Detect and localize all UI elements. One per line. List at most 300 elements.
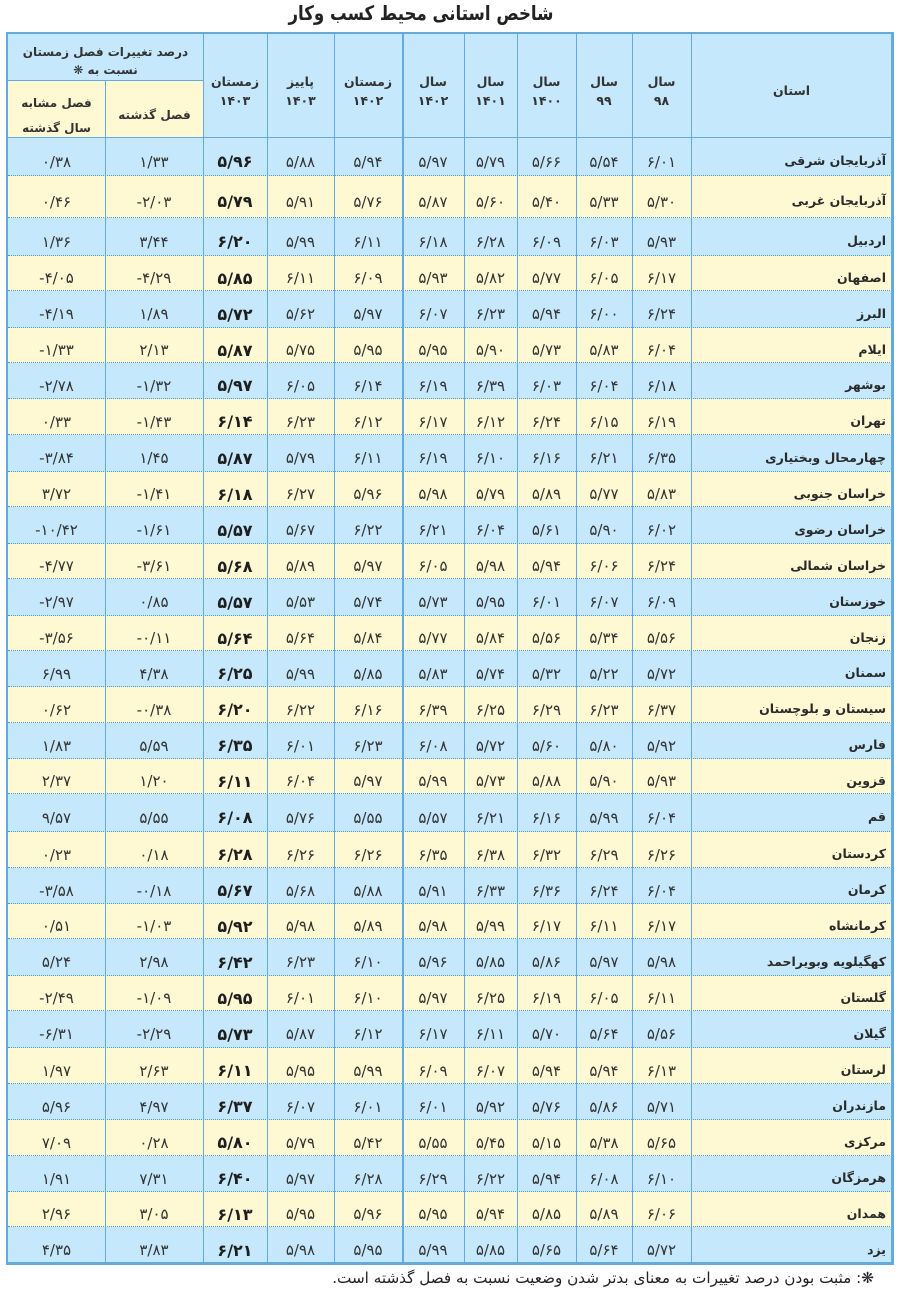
row: Golestan: -۱/۰۹ [137, 989, 171, 1007]
row: Qom: ۶/۱۶ [532, 808, 561, 826]
row: Isfahan: ۵/۸۲ [476, 269, 505, 287]
row: Fars: ۵/۵۹ [139, 736, 169, 754]
row: Ilam: -۱/۳۳ [39, 341, 74, 359]
row: Hormozgan: ۷/۳۱ [139, 1170, 169, 1188]
row: Golestan: ۶/۰۱ [286, 989, 315, 1007]
row: Mazandaran: ۴/۹۷ [139, 1098, 169, 1116]
row: Alborz: ۱/۸۹ [139, 305, 169, 323]
row: Qom: ۶/۰۸ [217, 808, 253, 827]
row: Kurdistan [8, 832, 892, 868]
row: Razavi Khorasan: ۶/۰۲ [647, 521, 676, 539]
row: North Khorasan: ۶/۰۵ [418, 557, 448, 575]
row: East Azerbaijan: ۵/۷۹ [476, 152, 505, 170]
row: Qazvin: ۵/۹۹ [418, 772, 448, 790]
row: Lorestan: ۱/۹۷ [42, 1062, 71, 1080]
header: year 98: ۹۸ [654, 92, 669, 108]
row: Kerman: ۶/۳۶ [532, 882, 561, 900]
row: Markazi: ۵/۵۵ [418, 1134, 448, 1152]
row: Razavi Khorasan: -۱۰/۴۲ [35, 521, 78, 539]
row: Chaharmahal and Bakhtiari: ۶/۱۱ [353, 449, 383, 467]
row: Kurdistan: ۶/۲۶ [286, 846, 315, 864]
row: Kerman: ۵/۶۷ [217, 881, 253, 900]
header: winter 1402: ۱۴۰۲ [353, 92, 383, 108]
row: Golestan [8, 976, 892, 1011]
row: Hormozgan: ۶/۲۸ [353, 1170, 383, 1188]
row: Sistan and Baluchestan [8, 687, 892, 723]
header: same season last year [8, 81, 105, 138]
row: Kermanshah: ۵/۹۸ [418, 917, 448, 935]
row: Semnan [8, 651, 892, 687]
row: West Azerbaijan: ۵/۳۳ [589, 192, 619, 210]
row: Fars: ۱/۸۳ [42, 736, 71, 754]
row: Isfahan [8, 256, 892, 291]
row: Qom: ۵/۵۵ [139, 808, 169, 826]
row: Mazandaran: ۵/۸۶ [589, 1098, 619, 1116]
row: Sistan and Baluchestan: ۰/۶۲ [42, 700, 71, 718]
row: West Azerbaijan: ۵/۷۶ [353, 192, 383, 210]
row: Lorestan: ۵/۹۴ [589, 1062, 619, 1080]
row: Sistan and Baluchestan: سیستان و بلوچستان [759, 701, 886, 716]
row: Yazd: ۵/۹۹ [418, 1241, 448, 1259]
row: Mazandaran [8, 1084, 892, 1120]
row: Khuzestan: ۰/۸۵ [139, 593, 169, 611]
row: Tehran: ۶/۲۴ [532, 412, 561, 430]
row: Semnan: ۶/۲۵ [217, 664, 253, 683]
row: West Azerbaijan: ۰/۴۶ [42, 192, 71, 210]
row: Ardabil: ۳/۴۴ [139, 232, 169, 250]
row: Chaharmahal and Bakhtiari: ۶/۱۰ [476, 449, 505, 467]
row: South Khorasan: -۱/۴۱ [137, 485, 171, 503]
row: North Khorasan: ۵/۶۸ [217, 556, 253, 576]
row: Golestan: گلستان [840, 990, 886, 1004]
row: Kohgiluyeh and Boyer-Ahmad: ۶/۴۲ [217, 952, 253, 972]
row: Isfahan: -۴/۲۹ [137, 269, 171, 287]
row: East Azerbaijan: ۱/۳۳ [139, 152, 169, 170]
row: Tehran: ۶/۱۹ [647, 412, 676, 430]
row: Zanjan: ۵/۵۶ [532, 629, 561, 647]
row: Ilam [8, 328, 892, 363]
row: Sistan and Baluchestan: ۶/۲۹ [532, 700, 561, 718]
row: Isfahan: -۴/۰۵ [39, 269, 74, 287]
row: Isfahan: ۶/۱۷ [647, 269, 676, 287]
row: West Azerbaijan: ۵/۴۰ [532, 192, 561, 210]
row: Zanjan: ۵/۶۴ [217, 628, 253, 648]
row: Ardabil: ۶/۰۳ [589, 232, 619, 250]
row: North Khorasan: ۵/۹۸ [476, 557, 505, 575]
row: Kohgiluyeh and Boyer-Ahmad: ۵/۹۸ [647, 953, 676, 971]
row: Yazd: ۶/۲۱ [217, 1240, 253, 1260]
row: South Khorasan: خراسان جنوبی [794, 486, 886, 500]
row: Semnan: ۵/۷۲ [647, 664, 676, 682]
header: winter 1402: زمستان [344, 74, 392, 88]
row: Gilan: ۵/۷۰ [532, 1025, 561, 1043]
header: winter 1402 [344, 74, 392, 108]
row: Hormozgan: ۵/۹۷ [286, 1170, 315, 1188]
row: Kerman: ۵/۸۸ [353, 882, 383, 900]
row: Yazd: ۵/۷۲ [647, 1241, 676, 1259]
row: Hormozgan: هرمزگان [831, 1170, 886, 1185]
row: Gilan: ۵/۸۷ [286, 1025, 315, 1043]
row: Hormozgan: ۶/۱۰ [647, 1170, 676, 1188]
row: Qazvin: ۶/۰۴ [286, 772, 315, 790]
header: year 1400: ۱۴۰۰ [531, 92, 562, 108]
row: Kurdistan: ۶/۲۸ [217, 845, 253, 864]
row: South Khorasan: ۵/۷۹ [476, 485, 505, 503]
row: Ilam: ۵/۸۳ [589, 341, 619, 359]
row: Alborz: ۶/۰۰ [589, 305, 619, 323]
row: Qom: ۹/۵۷ [42, 808, 71, 826]
row: Fars: ۵/۸۰ [589, 736, 619, 754]
row: Mazandaran: ۵/۷۶ [532, 1098, 561, 1116]
row: Sistan and Baluchestan: -۰/۳۸ [137, 700, 171, 718]
row: Khuzestan: ۵/۵۷ [217, 592, 253, 612]
row: Ardabil: ۵/۹۳ [647, 232, 676, 250]
row: Sistan and Baluchestan: ۶/۳۷ [647, 700, 676, 718]
row: Markazi: ۵/۶۵ [647, 1134, 676, 1152]
row: Tehran: ۰/۳۳ [42, 412, 71, 430]
row: Golestan: ۶/۲۵ [476, 989, 505, 1007]
header: percent change group: نسبت به ❋ [73, 62, 138, 76]
row: East Azerbaijan: ۵/۹۷ [418, 152, 448, 170]
header: percent change group: درصد تغییرات فصل زمستان [23, 44, 188, 58]
row: Hormozgan: ۵/۹۴ [532, 1170, 561, 1188]
row: Kurdistan: ۶/۳۸ [476, 846, 505, 864]
row: Khuzestan [8, 579, 892, 616]
row: Razavi Khorasan: -۱/۶۱ [137, 521, 171, 539]
row: Kermanshah: ۶/۱۱ [589, 917, 619, 935]
row: Ardabil: ۶/۱۱ [353, 232, 383, 250]
row: West Azerbaijan: ۵/۸۷ [418, 192, 448, 210]
row: Ilam: ۲/۱۳ [139, 341, 169, 359]
row: Ilam: ۵/۷۵ [286, 341, 315, 359]
title: شاخص استانی محیط کسب وکار [288, 1, 554, 25]
row: Bushehr: -۲/۷۸ [39, 376, 74, 394]
row: Yazd: ۵/۶۵ [532, 1241, 561, 1259]
row: Isfahan: ۵/۷۷ [532, 269, 561, 287]
row: Fars: ۵/۹۲ [647, 736, 676, 754]
row: Golestan: ۶/۱۰ [353, 989, 383, 1007]
row: Golestan: ۵/۹۷ [418, 989, 448, 1007]
row: Kermanshah: کرمانشاه [829, 918, 886, 932]
row: Zanjan: ۵/۶۴ [286, 629, 315, 647]
row: Razavi Khorasan: ۵/۶۱ [532, 521, 561, 539]
row: Khuzestan: ۶/۰۹ [647, 593, 676, 611]
row: Ilam: ۶/۰۴ [647, 341, 676, 359]
header: winter 1403 [211, 74, 259, 108]
row: Isfahan: ۶/۱۱ [286, 269, 315, 287]
header: year 98 [648, 74, 675, 108]
row: Zanjan: زنجان [850, 630, 886, 644]
row: Zanjan: ۵/۵۶ [647, 629, 676, 647]
row: Chaharmahal and Bakhtiari: -۳/۸۴ [39, 449, 74, 467]
row: Gilan [8, 1011, 892, 1048]
row: Semnan: ۵/۹۹ [286, 664, 315, 682]
row: Kermanshah: ۵/۹۸ [286, 917, 315, 935]
row: Razavi Khorasan: ۵/۹۰ [589, 521, 619, 539]
row: Alborz: ۵/۹۷ [353, 305, 383, 323]
row: Ardabil: ۶/۱۸ [418, 232, 448, 250]
row: Bushehr: ۶/۰۵ [286, 376, 315, 394]
row: Zanjan: ۵/۸۴ [353, 629, 383, 647]
row: Semnan: ۵/۲۲ [589, 664, 619, 682]
row: West Azerbaijan: ۵/۷۹ [217, 192, 253, 211]
row: Gilan: گیلان [853, 1026, 886, 1040]
row: Kermanshah: -۱/۰۳ [137, 917, 171, 935]
header: same season last year: سال گذشته [22, 120, 91, 134]
row: Markazi: ۵/۴۵ [476, 1134, 505, 1152]
row: Hamedan: ۶/۰۶ [647, 1205, 676, 1223]
row: Khuzestan: -۲/۹۷ [39, 593, 74, 611]
row: Hormozgan [8, 1156, 892, 1192]
row: Fars: فارس [849, 737, 886, 752]
row: East Azerbaijan: ۶/۰۱ [647, 152, 676, 170]
header: year 1400 [531, 74, 562, 108]
row: Fars: ۶/۰۱ [286, 736, 315, 754]
row: Kohgiluyeh and Boyer-Ahmad: ۵/۸۶ [532, 953, 561, 971]
row: North Khorasan: ۵/۹۴ [532, 557, 561, 575]
row: Kerman: ۶/۰۴ [647, 882, 676, 900]
row: Ilam: ایلام [858, 342, 886, 356]
row: Golestan: ۶/۱۹ [532, 989, 561, 1007]
row: Qazvin: ۶/۱۱ [217, 772, 253, 790]
row: Yazd: ۵/۹۵ [353, 1241, 383, 1259]
row: Markazi [8, 1120, 892, 1156]
row: Mazandaran: ۵/۹۲ [476, 1098, 505, 1116]
row: Lorestan: ۶/۱۱ [217, 1061, 253, 1080]
row: Kerman: ۶/۲۴ [589, 882, 619, 900]
row: Qom: قم [868, 809, 886, 824]
row: Semnan: ۶/۹۹ [42, 664, 71, 682]
row: Golestan: ۵/۹۵ [217, 988, 253, 1008]
row: Isfahan: اصفهان [837, 270, 886, 284]
row: North Khorasan: -۳/۶۱ [137, 557, 171, 575]
row: Lorestan: ۲/۶۳ [139, 1062, 169, 1080]
row: Alborz: ۵/۶۲ [286, 305, 315, 323]
row: Razavi Khorasan [8, 507, 892, 544]
row: Semnan: ۴/۳۸ [139, 664, 169, 682]
row: Chaharmahal and Bakhtiari: ۶/۲۱ [589, 449, 619, 467]
row: Fars: ۵/۷۲ [476, 736, 505, 754]
row: Gilan: -۶/۳۱ [39, 1025, 74, 1043]
row: Kurdistan: ۶/۳۲ [532, 846, 561, 864]
row: Lorestan: ۵/۹۵ [286, 1062, 315, 1080]
row: Fars: ۵/۶۰ [532, 736, 561, 754]
row: Semnan: ۵/۷۴ [476, 664, 505, 682]
row: Markazi: ۵/۴۲ [353, 1134, 383, 1152]
row: South Khorasan: ۵/۹۶ [353, 485, 383, 503]
row: Kohgiluyeh and Boyer-Ahmad: ۵/۹۷ [589, 953, 619, 971]
row: Golestan: ۶/۱۱ [647, 989, 676, 1007]
row: East Azerbaijan: ۵/۹۶ [217, 152, 253, 171]
row: Kohgiluyeh and Boyer-Ahmad: ۶/۱۰ [353, 953, 383, 971]
row: Alborz: ۶/۰۷ [418, 305, 448, 323]
row: Khuzestan: ۵/۵۳ [286, 593, 315, 611]
row: Qazvin: قزوین [846, 772, 886, 788]
row: Qazvin: ۱/۲۰ [139, 772, 169, 790]
row: Isfahan: ۵/۹۳ [418, 269, 448, 287]
row: Hormozgan: ۶/۰۸ [589, 1170, 619, 1188]
row: Qom [8, 794, 892, 832]
row: Kurdistan: ۰/۱۸ [139, 846, 169, 864]
row: Hamedan: ۵/۸۹ [589, 1205, 619, 1223]
header: year 1402: ۱۴۰۲ [418, 92, 448, 108]
row: Hamedan: ۵/۹۵ [286, 1205, 315, 1223]
row: Tehran: ۶/۱۵ [589, 412, 619, 430]
row: South Khorasan: ۵/۸۳ [647, 485, 676, 503]
row: Lorestan: ۶/۱۳ [647, 1062, 676, 1080]
footnote: ❋: مثبت بودن درصد تغییرات به معنای بدتر شدن وضعیت نسبت به فصل گذشته است. [332, 1269, 874, 1287]
row: Hormozgan: ۶/۴۰ [217, 1169, 253, 1188]
row: Kurdistan: ۶/۳۵ [418, 846, 448, 864]
row: Sistan and Baluchestan: ۶/۲۰ [217, 700, 253, 719]
row: Qom: ۵/۵۷ [418, 808, 448, 826]
row: South Khorasan [8, 472, 892, 507]
row: Tehran: -۱/۴۳ [137, 412, 171, 430]
row: Hamedan [8, 1192, 892, 1227]
header: year 1401: سال [477, 74, 504, 88]
row: Kermanshah [8, 904, 892, 939]
row: Mazandaran: ۶/۰۱ [418, 1098, 448, 1116]
row: Qazvin: ۵/۹۳ [647, 772, 676, 790]
header: percent change group [23, 44, 188, 76]
row: Kerman [8, 868, 892, 904]
row: Qom: ۶/۲۱ [476, 808, 505, 826]
row: Markazi: مرکزی [844, 1134, 886, 1149]
row: Bushehr: ۵/۹۷ [217, 376, 253, 395]
row: Fars: ۶/۳۵ [217, 736, 253, 755]
header: autumn 1403 [285, 74, 316, 108]
row: Kermanshah: ۰/۵۱ [42, 917, 71, 935]
row: Zanjan: ۵/۷۷ [418, 629, 448, 647]
row: Kerman: کرمان [848, 882, 886, 897]
header: year 1402: سال [419, 74, 447, 88]
header: previous season: فصل گذشته [118, 108, 191, 122]
row: Kerman: ۶/۳۳ [476, 882, 505, 900]
row: Lorestan: ۵/۹۴ [532, 1062, 561, 1080]
header: autumn 1403: ۱۴۰۳ [285, 92, 316, 108]
row: Hamedan: ۵/۹۵ [418, 1205, 448, 1223]
row: West Azerbaijan: آذربایجان غربی [792, 193, 886, 208]
row: Khuzestan: ۶/۰۱ [532, 593, 561, 611]
row: Mazandaran: مازندران [832, 1098, 886, 1113]
row: East Azerbaijan: ۵/۹۴ [353, 152, 383, 170]
row: Qazvin: ۵/۹۰ [589, 772, 619, 790]
row: South Khorasan: ۵/۷۷ [589, 485, 619, 503]
row: Bushehr: ۶/۳۹ [476, 376, 505, 394]
row: Bushehr: ۶/۰۳ [532, 376, 561, 394]
row: Zanjan [8, 616, 892, 651]
header: winter 1403: ۱۴۰۳ [220, 92, 250, 108]
row: Tehran: ۶/۲۳ [286, 412, 315, 430]
row: Gilan: ۶/۱۲ [353, 1025, 383, 1043]
row: Qazvin [8, 759, 892, 794]
row: Tehran: تهران [850, 413, 886, 428]
row: Hamedan: ۵/۸۵ [532, 1205, 561, 1223]
row: North Khorasan: -۴/۷۷ [39, 557, 74, 575]
row: Khuzestan: ۵/۷۳ [418, 593, 448, 611]
row: Razavi Khorasan: خراسان رضوی [794, 522, 886, 536]
row: Ardabil: ۵/۹۹ [286, 232, 315, 250]
row: Zanjan: -۳/۵۶ [39, 629, 74, 647]
row: Fars [8, 723, 892, 759]
row: Ilam: ۵/۹۵ [418, 341, 448, 359]
row: Alborz [8, 291, 892, 328]
row: North Khorasan: ۵/۹۷ [353, 557, 383, 575]
row: Hamedan: ۶/۱۳ [217, 1204, 253, 1224]
row: Zanjan: ۵/۸۴ [476, 629, 505, 647]
header: autumn 1403: پاییز [287, 74, 314, 88]
row: Chaharmahal and Bakhtiari: ۶/۳۵ [647, 449, 676, 467]
row: Chaharmahal and Bakhtiari: ۵/۷۹ [286, 449, 315, 467]
row: Yazd: ۳/۸۳ [139, 1241, 169, 1259]
row: Semnan: ۵/۳۲ [532, 664, 561, 682]
row: Yazd: ۵/۶۴ [589, 1241, 619, 1259]
row: Kerman: -۳/۵۸ [39, 882, 74, 900]
row: Lorestan: ۵/۹۹ [353, 1062, 383, 1080]
header: year 99: سال [590, 74, 618, 88]
row: Kurdistan: کردستان [832, 846, 886, 861]
row: North Khorasan: ۶/۲۴ [647, 557, 676, 575]
row: Ardabil: ۶/۰۹ [532, 232, 561, 250]
row: Qazvin: ۵/۸۸ [532, 772, 561, 790]
row: Markazi: ۵/۳۸ [589, 1134, 619, 1152]
row: Ardabil: ۱/۳۶ [42, 232, 71, 250]
row: Ilam: ۵/۹۰ [476, 341, 505, 359]
row: Markazi: ۷/۰۹ [42, 1134, 71, 1152]
header: year 98: سال [648, 74, 675, 88]
row: Chaharmahal and Bakhtiari: چهارمحال وبختیاری [765, 450, 886, 464]
row: Ardabil: ۶/۲۰ [217, 232, 253, 251]
row: Kurdistan: ۰/۲۳ [42, 846, 71, 864]
header: year 1400: سال [533, 74, 560, 88]
row: Isfahan: ۵/۸۵ [217, 268, 253, 288]
header: year 99: ۹۹ [596, 92, 612, 108]
row: Mazandaran: ۵/۹۶ [42, 1098, 71, 1116]
row: Razavi Khorasan: ۵/۵۷ [217, 520, 253, 540]
row: Fars: ۶/۰۸ [418, 736, 448, 754]
row: Khuzestan: ۵/۹۵ [476, 593, 505, 611]
row: Kohgiluyeh and Boyer-Ahmad: کهگیلویه وبویراحمد [767, 954, 886, 968]
row: Tehran: ۶/۱۴ [217, 412, 253, 431]
row: Alborz: ۵/۹۴ [532, 305, 561, 323]
row: Bushehr: بوشهر [845, 377, 886, 392]
row: Yazd: ۵/۸۵ [476, 1241, 505, 1259]
header: same season last year: فصل مشابه [21, 96, 92, 110]
row: Hamedan: ۳/۰۵ [139, 1205, 169, 1223]
row: Qom: ۵/۹۹ [589, 808, 619, 826]
row: Ardabil: اردبیل [847, 233, 886, 248]
row: Qom: ۵/۷۶ [286, 808, 315, 826]
row: Razavi Khorasan: ۶/۲۲ [353, 521, 383, 539]
row: Zanjan: -۰/۱۱ [137, 629, 171, 647]
row: Gilan: ۵/۶۴ [589, 1025, 619, 1043]
row: Hamedan: ۵/۹۶ [353, 1205, 383, 1223]
row: Tehran: ۶/۱۷ [418, 412, 448, 430]
row: East Azerbaijan: آذربایجان شرقی [784, 153, 886, 168]
row: Golestan: ۶/۰۵ [589, 989, 619, 1007]
row: Sistan and Baluchestan: ۶/۱۶ [353, 700, 383, 718]
row: Isfahan: ۶/۰۹ [353, 269, 383, 287]
header: winter 1403: زمستان [211, 74, 259, 88]
row: Razavi Khorasan: ۶/۰۴ [476, 521, 505, 539]
row: Tehran: ۶/۱۲ [476, 412, 505, 430]
header: year 1401: ۱۴۰۱ [475, 92, 506, 108]
row: Hormozgan: ۶/۲۹ [418, 1170, 448, 1188]
row: Chaharmahal and Bakhtiari: ۵/۸۷ [217, 448, 253, 468]
row: Mazandaran: ۶/۳۷ [217, 1097, 253, 1116]
row: Bushehr: ۶/۱۹ [418, 376, 448, 394]
row: East Azerbaijan: ۰/۳۸ [42, 152, 71, 170]
